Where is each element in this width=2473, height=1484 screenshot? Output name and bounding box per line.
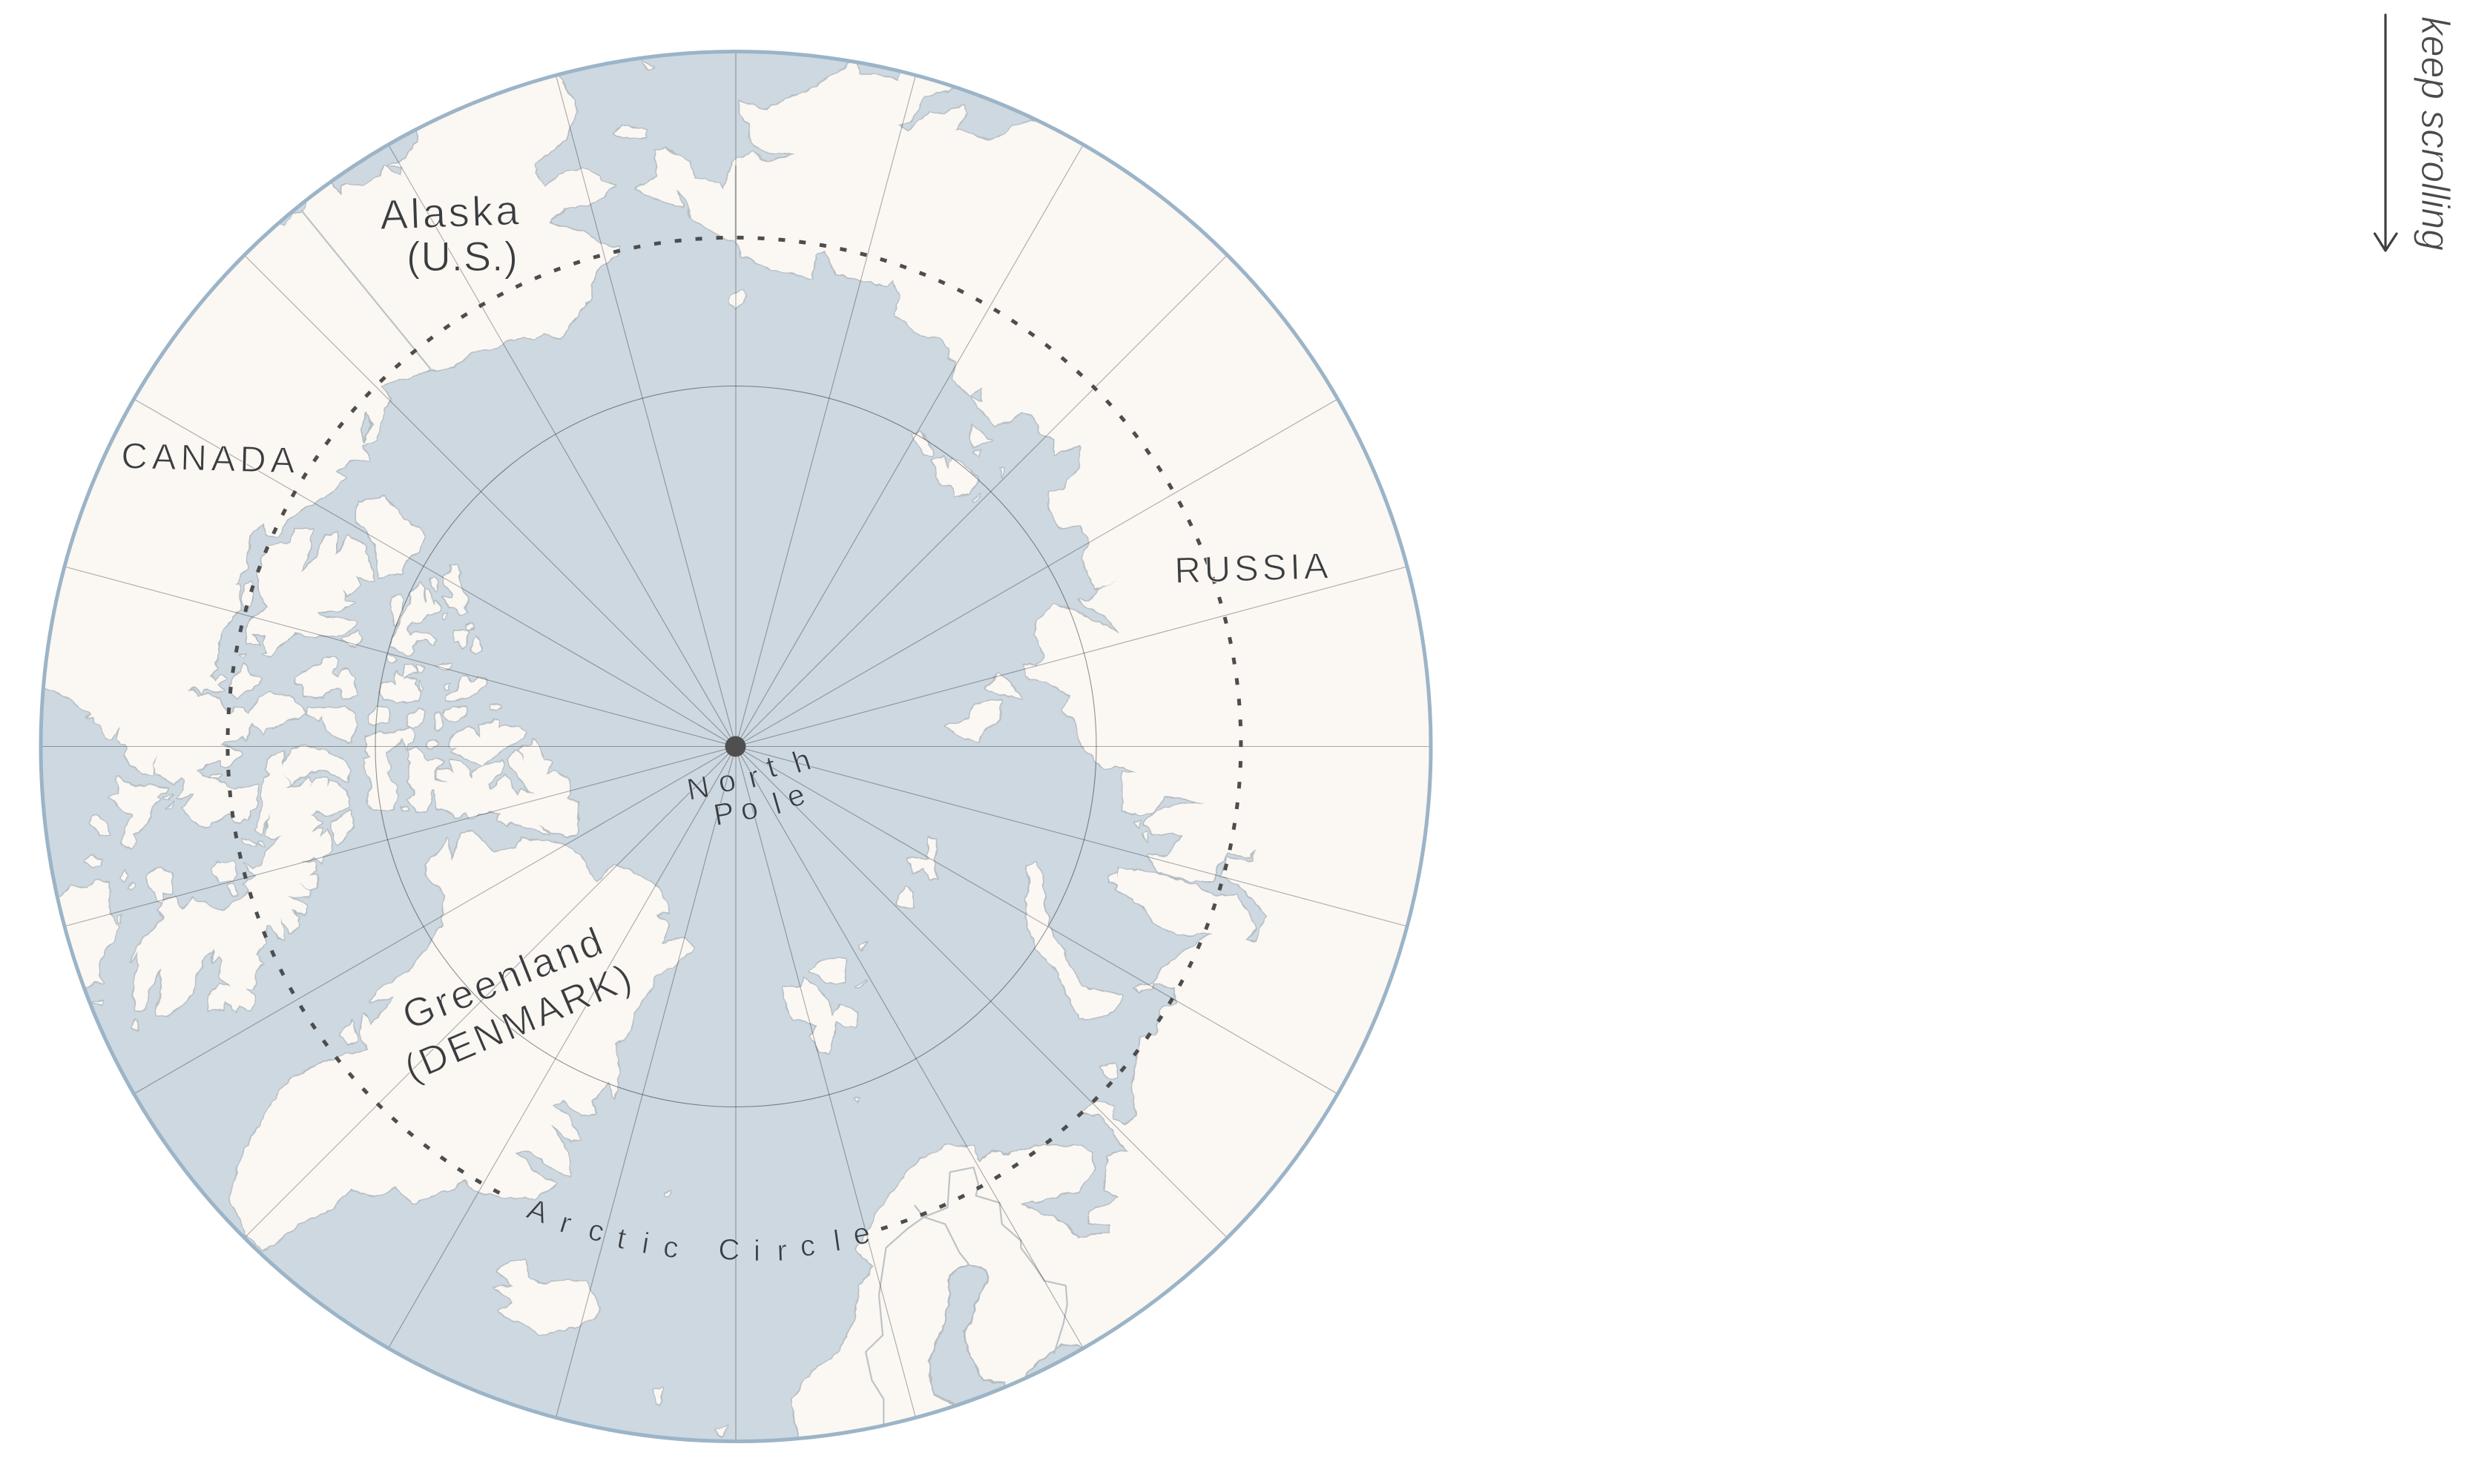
water: Gulf of Bothnia, Gulf of Finland and inlets bbox=[927, 1264, 1081, 1405]
land: western Russia, Scandinavia and Barents islands bbox=[782, 719, 1429, 1437]
land: Queen Elizabeth Islands bbox=[365, 565, 580, 836]
label: Russia: RUSSIA bbox=[1174, 547, 1329, 591]
land masses with coastline bbox=[45, 60, 1429, 1438]
map: polar projection bbox=[0, 0, 1546, 1484]
label: Pole: Pole bbox=[711, 776, 809, 832]
label: North: North bbox=[685, 742, 814, 807]
label: Canada: CANADA bbox=[121, 436, 295, 481]
ocean disc bbox=[41, 52, 1431, 1442]
land: Alaska and western Canada bbox=[50, 60, 656, 644]
borders: Alaska, Bering and Nordic bbox=[301, 165, 1067, 1425]
land: Hudson Bay region, Baffin Island and Quebec bbox=[45, 664, 358, 1032]
water: Canadian inlet bbox=[362, 412, 372, 442]
land: northern Russia and Siberian islands bbox=[634, 62, 1429, 749]
label: Alaska: Alaska bbox=[379, 186, 520, 238]
graticule: inner parallel bbox=[375, 386, 1096, 1107]
North Pole marker bbox=[725, 736, 746, 756]
label: U.S.: (U.S.) bbox=[406, 233, 518, 280]
label: Denmark: (DENMARK) bbox=[398, 956, 638, 1090]
arrow: scroll down bbox=[2375, 15, 2397, 251]
text: keep scrolling: keep scrolling bbox=[2413, 16, 2457, 251]
graticule: meridians every 15 degrees bbox=[41, 52, 1431, 1442]
land: Greenland and Iceland bbox=[229, 831, 726, 1437]
land: central Canada and islands bbox=[171, 529, 373, 699]
Arctic Circle dashed line bbox=[228, 237, 1241, 1229]
label: Arctic Circle: Arctic Circle bbox=[523, 1193, 873, 1267]
label: Greenland: Greenland bbox=[396, 919, 608, 1038]
land fill pass hiding interior seams bbox=[45, 61, 1429, 1437]
outer ring of map bbox=[41, 52, 1431, 1442]
